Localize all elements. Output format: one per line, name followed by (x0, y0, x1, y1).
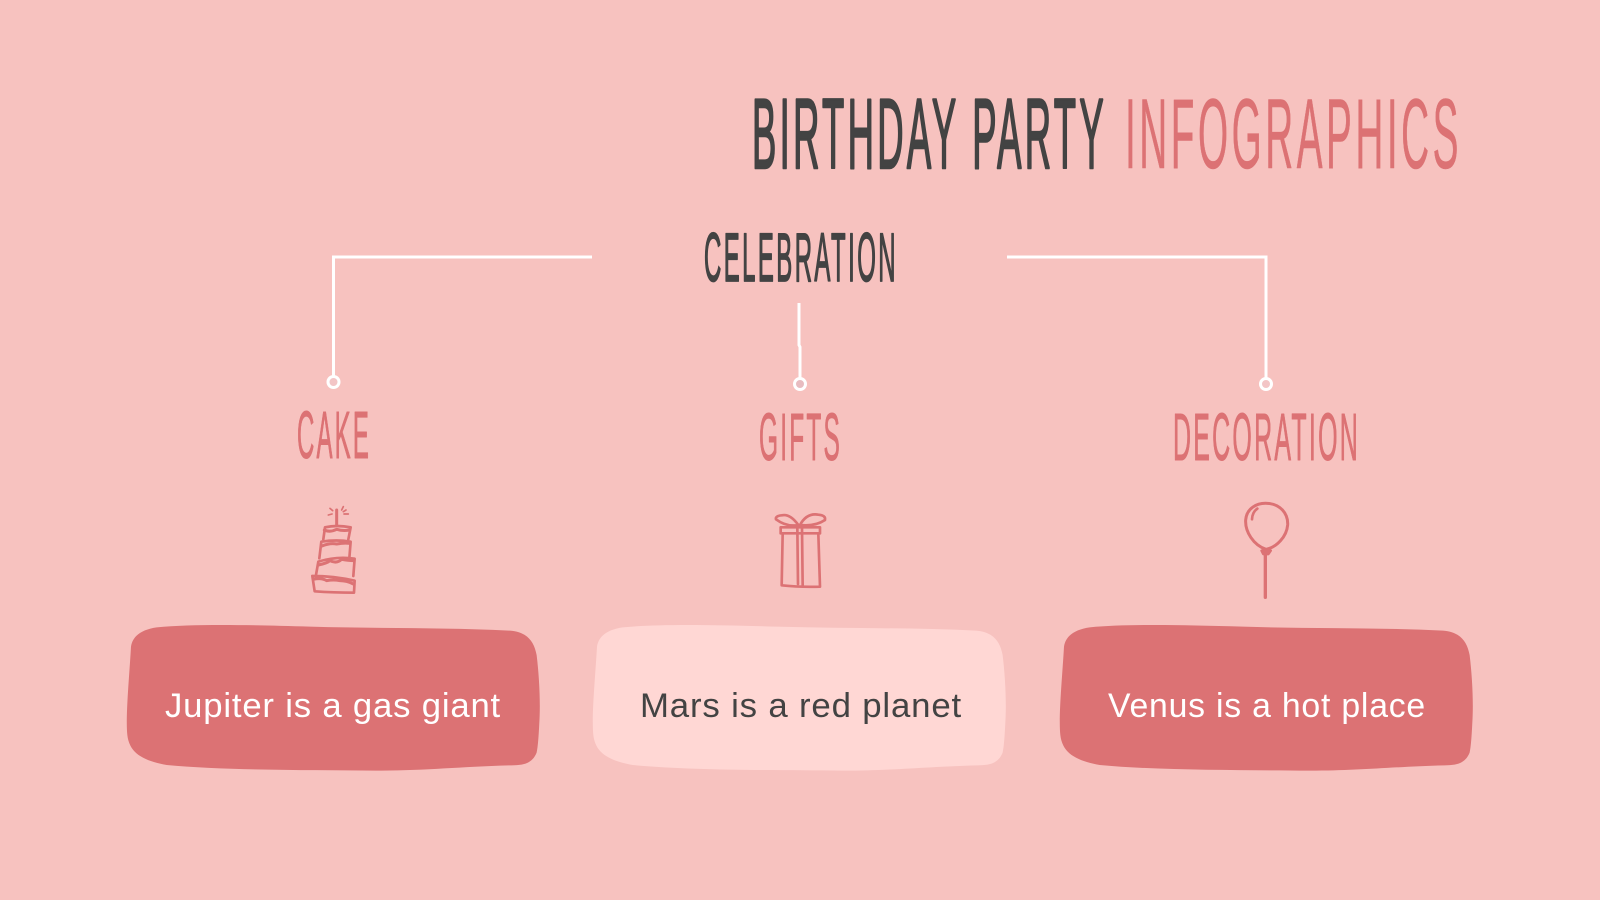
text: CELEBRATION (704, 219, 898, 296)
text: CAKE (297, 398, 371, 473)
text: GIFTS (759, 400, 842, 475)
panel: venus (1060, 625, 1473, 771)
panel: jupiter (127, 625, 540, 771)
panel: mars (593, 625, 1006, 771)
connector: center branch (794, 303, 806, 390)
text: jupiter: Jupiter is a gas giant (165, 687, 501, 725)
icon: balloon (1246, 503, 1288, 597)
text: venus: Venus is a hot place (1108, 687, 1426, 725)
connector: right branch (1007, 257, 1272, 390)
icon: gift (776, 514, 825, 587)
text: mars: Mars is a red planet (640, 687, 962, 725)
icon: cake (312, 507, 355, 593)
connector: left branch (328, 257, 592, 388)
